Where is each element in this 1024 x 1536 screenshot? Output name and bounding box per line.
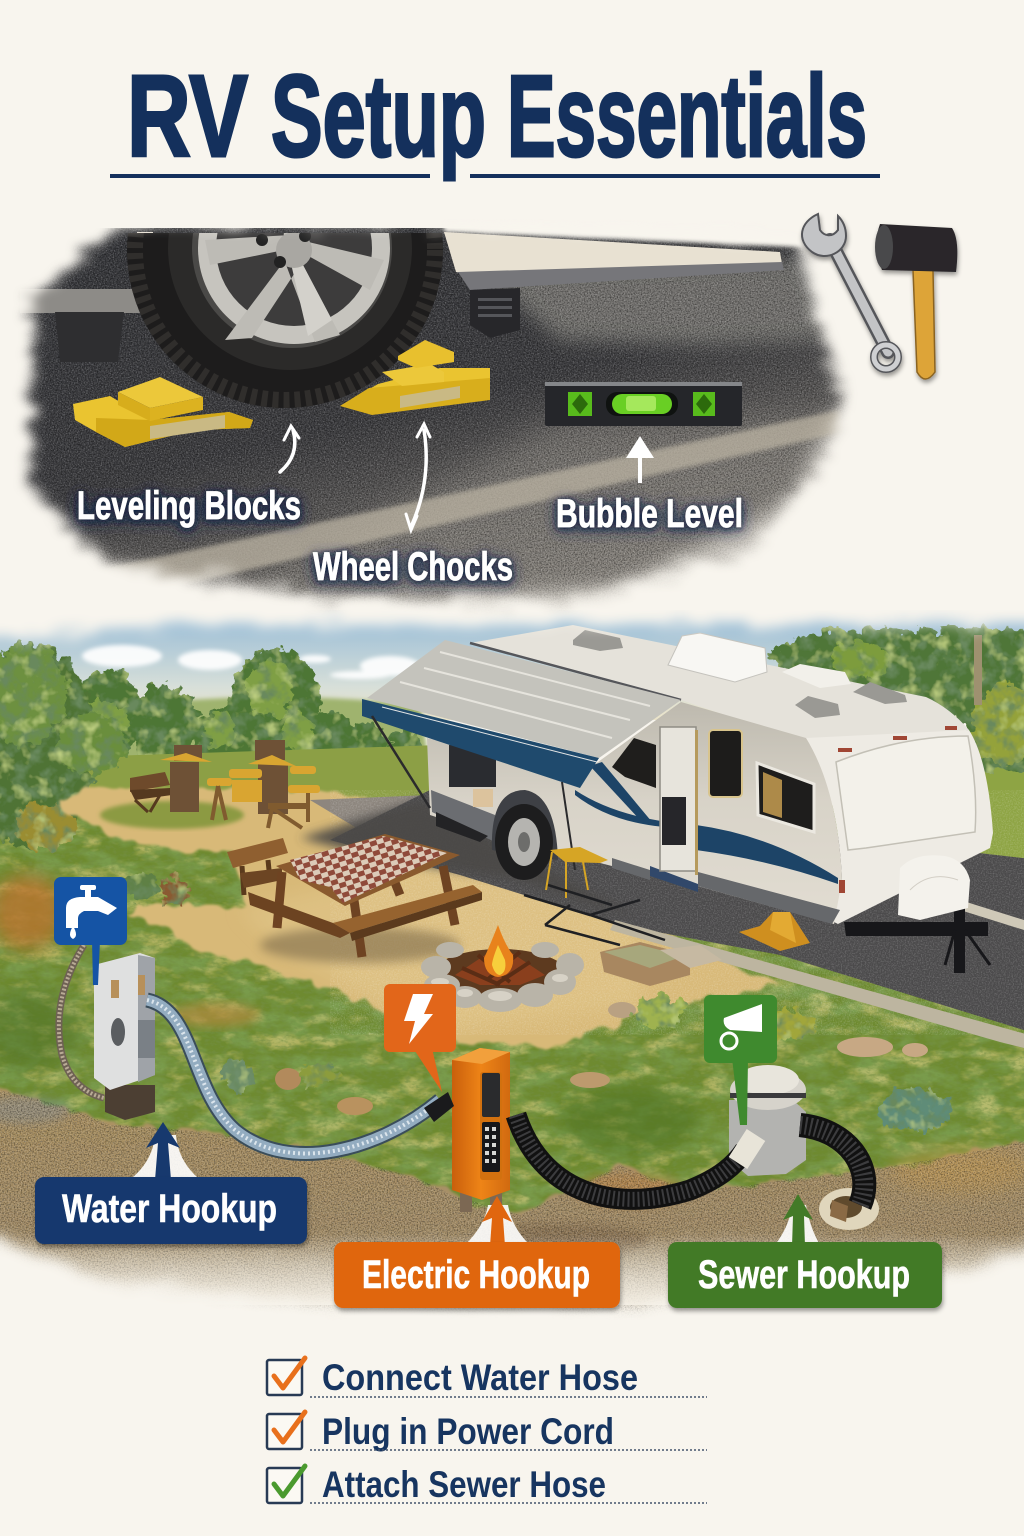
adirondack chairs (170, 740, 288, 814)
sewer ring (819, 1188, 879, 1230)
distant hills (128, 695, 428, 756)
travel trailer (362, 625, 993, 973)
door (660, 727, 698, 875)
small shrubs near table (120, 871, 189, 904)
title: RV (127, 51, 248, 181)
yellow umbrellas and tables (160, 753, 320, 802)
stone slab (600, 942, 722, 986)
pedestal body (94, 953, 155, 1090)
item: plug in power cord: Plug in Power Cord (322, 1411, 614, 1452)
front window panel (836, 736, 976, 850)
cord plug (424, 1092, 454, 1122)
icon: wheel and tire (127, 233, 443, 408)
gravel driveway and road (310, 790, 1024, 1052)
arrow: to leveling blocks (280, 426, 299, 472)
title (110, 51, 880, 181)
checklist (267, 1357, 707, 1505)
gravel foreground (0, 1075, 1024, 1325)
item: connect water hose: Connect Water Hose (322, 1357, 638, 1398)
vehicle body left (20, 232, 153, 362)
pedestal base (105, 1085, 155, 1120)
icon: rubber mallet (875, 224, 957, 379)
left bench (248, 892, 350, 938)
utility pole (974, 635, 982, 705)
bubble level (545, 382, 742, 426)
icon: sewer pipe (721, 1004, 762, 1049)
black sewer hose (516, 1115, 864, 1205)
picnic bench back (227, 838, 288, 895)
table top (276, 834, 460, 906)
fire pit (421, 925, 584, 1012)
table legs (212, 786, 308, 828)
side wall (427, 702, 842, 924)
blue water hose (147, 1000, 440, 1153)
windows (449, 730, 814, 832)
label: wheel chocks: Wheel Chocks (313, 545, 513, 589)
arrow: to bubble level (626, 436, 654, 483)
grass island (100, 801, 244, 829)
asphalt ground (17, 228, 852, 612)
panel: campsite scene (0, 610, 1024, 1325)
marker lights (838, 726, 957, 893)
label: leveling blocks: Leveling Blocks (77, 484, 301, 528)
picnic table (248, 834, 482, 963)
water hookup pedestal (59, 945, 440, 1153)
leveling blocks (73, 377, 253, 447)
rocks and shrubs in grass (222, 994, 951, 1132)
camp chair and step rack (524, 847, 665, 945)
icon: faucet (66, 885, 117, 939)
blue swoosh graphics (575, 762, 838, 884)
label: bubble level: Bubble Level (556, 492, 743, 536)
roof (470, 625, 969, 745)
right grass (981, 767, 1024, 858)
RV shadow (300, 800, 640, 920)
arrow: to wheel chocks (406, 424, 430, 530)
table legs (277, 866, 455, 957)
label: sewer hookup (668, 1242, 942, 1308)
sky (0, 610, 1024, 720)
label: water hookup: Water Hookup (62, 1187, 277, 1231)
label: electric hookup: Electric Hookup (362, 1253, 590, 1297)
table shadow (260, 927, 460, 963)
callout: power icon (384, 984, 456, 1092)
pedestal feet (460, 1190, 502, 1212)
front bench (333, 885, 482, 941)
sandy campsite area (60, 789, 780, 1048)
title: Setup (271, 51, 486, 181)
checked tablecloth (290, 836, 447, 903)
electric hookup pedestal (424, 1048, 510, 1212)
callout: sewer icon (704, 995, 777, 1125)
distant picnic sets (130, 740, 320, 828)
sewer hookup (516, 1065, 879, 1230)
clouds (82, 645, 420, 679)
label: water hookup (35, 1177, 307, 1244)
label: sewer hookup: Sewer Hookup (698, 1253, 910, 1297)
panel: wheel leveling scene (17, 228, 852, 612)
wheel chocks (340, 340, 490, 415)
arrow: water hookup (132, 1122, 198, 1180)
awning (362, 640, 681, 870)
callout: water icon (54, 877, 127, 985)
label: electric hookup (334, 1242, 620, 1308)
sewer fitting (729, 1065, 806, 1176)
icon: wrench (802, 214, 898, 369)
pedestal body (452, 1048, 510, 1200)
painted parking line (112, 409, 840, 584)
grass field (0, 805, 1024, 1214)
back grass (88, 745, 429, 798)
yellow jack stand (739, 912, 810, 951)
treeline left (82, 645, 422, 755)
treeline right (765, 628, 1024, 770)
big bush left (0, 643, 126, 849)
arrow: sewer hookup (775, 1194, 820, 1246)
item: attach sewer hose: Attach Sewer Hose (322, 1464, 606, 1505)
wheel (492, 790, 558, 880)
left bench (130, 772, 172, 812)
propane cover and tongue (844, 855, 990, 973)
front cap (806, 730, 993, 924)
arrow: electric hookup (465, 1196, 530, 1246)
roof vents and AC (470, 630, 907, 718)
icon: lightning bolt (404, 994, 433, 1044)
light sand glow (264, 872, 630, 1019)
vehicle body right sill (444, 232, 784, 338)
silver supply hose (59, 945, 104, 1098)
rear lower skirt (431, 790, 840, 924)
